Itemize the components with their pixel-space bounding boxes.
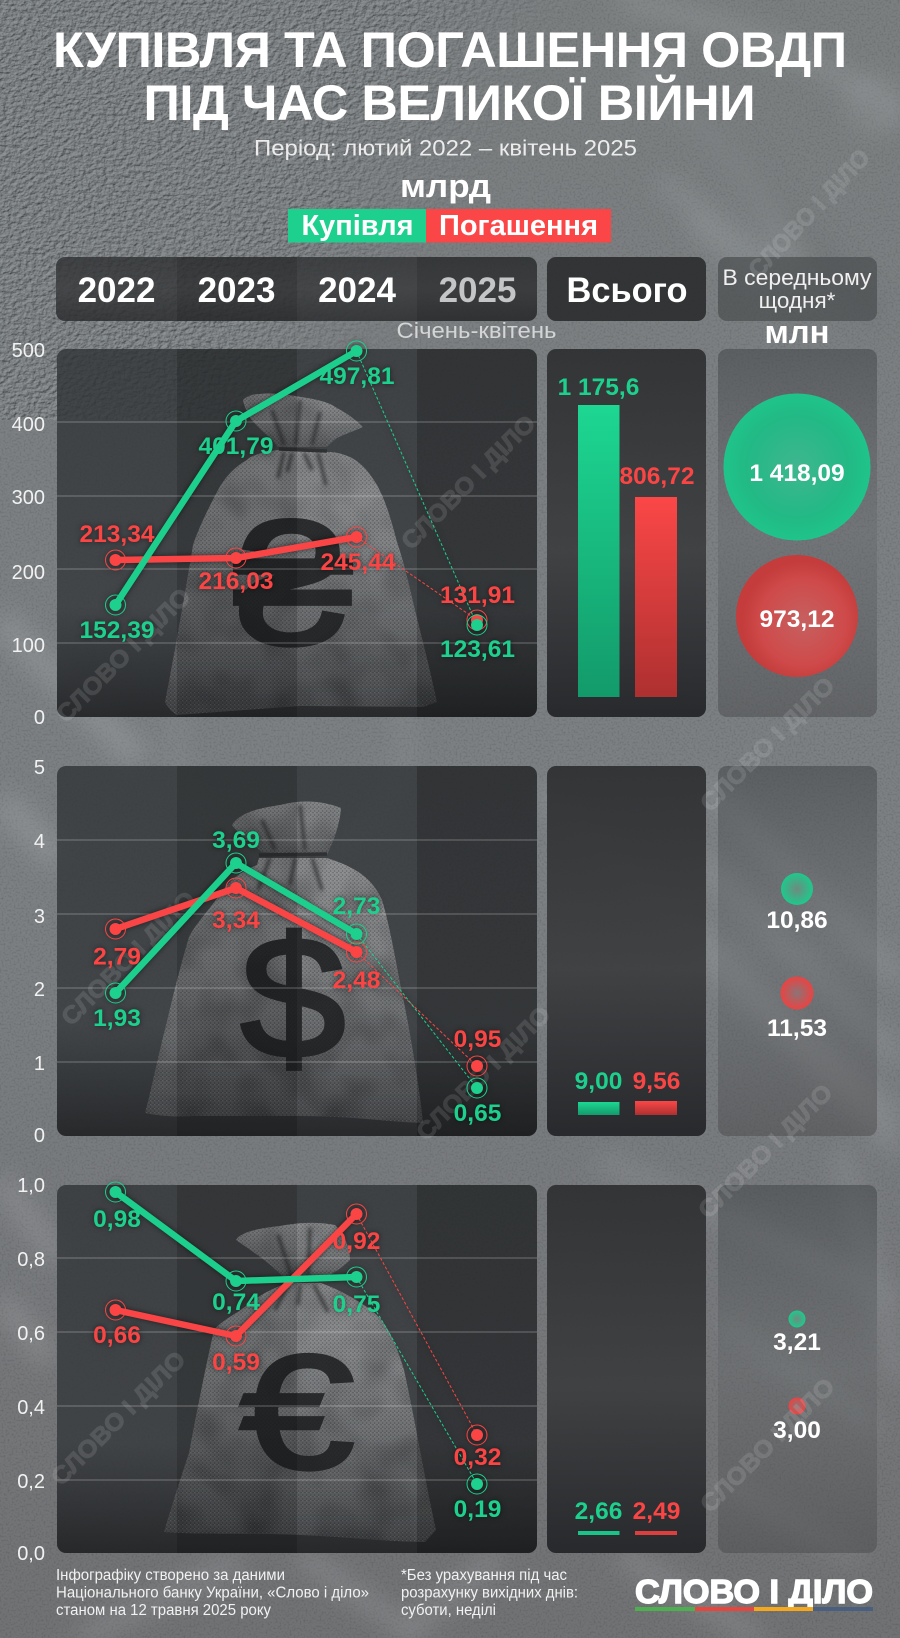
header: daily average: щодня* [759, 288, 836, 313]
y axis: hryvnia [12, 340, 45, 729]
line chart: dollar: 3,69 [212, 827, 260, 854]
y axis: dollar [34, 757, 45, 1147]
line chart: dollar: 0,65 [454, 1100, 501, 1127]
y axis: dollar: 2 [34, 979, 45, 1001]
line chart: euro: 0,75 [333, 1291, 380, 1318]
column headers: 2025 [439, 271, 516, 310]
watermarks: СЛОВО І ДІЛО [695, 672, 840, 817]
unit label: млн: млн [764, 314, 830, 350]
y axis: hryvnia: 400 [12, 414, 45, 436]
y axis: euro [17, 1175, 45, 1565]
line chart: hryvnia: 245,44 [321, 549, 396, 576]
line chart: dollar: 3,34 [212, 907, 260, 934]
column headers [56, 257, 537, 321]
bar: total purchases: 2,66 [575, 1498, 622, 1525]
y axis: euro: 0,4 [17, 1397, 45, 1419]
icon: money bag euro [164, 1185, 537, 1553]
title [53, 21, 847, 131]
y axis: euro: 1,0 [17, 1175, 45, 1197]
column headers: 2022 [78, 271, 155, 310]
panel: total hryvnia [547, 349, 706, 717]
line chart: euro: 0,74 [212, 1289, 260, 1316]
y axis: hryvnia: 300 [12, 487, 45, 509]
footer: source [56, 1567, 369, 1619]
y axis: dollar: 5 [34, 757, 45, 779]
header: total [547, 257, 706, 321]
line chart: dollar: 1,93 [93, 1005, 141, 1032]
circle: daily purchases: 3,21 [773, 1329, 821, 1356]
line chart: euro: 0,19 [454, 1496, 501, 1523]
watermarks: СЛОВО І ДІЛО [695, 1373, 840, 1518]
y axis: dollar: 1 [34, 1053, 45, 1075]
line chart: euro: 0,92 [333, 1228, 380, 1255]
circle: daily purchases [766, 873, 828, 934]
circle: daily purchases [773, 1310, 821, 1356]
watermarks: СЛОВО І ДІЛО [51, 583, 196, 728]
panel: daily dollar [718, 766, 877, 1136]
line chart: dollar [93, 827, 501, 1127]
gridlines [57, 422, 537, 643]
circle: daily redemptions: 3,00 [773, 1417, 821, 1444]
circle: daily redemptions [773, 1398, 821, 1444]
line chart: dollar: 0,95 [454, 1026, 501, 1053]
watermarks: СЛОВО І ДІЛО [693, 1079, 838, 1224]
watermarks: СЛОВО І ДІЛО [46, 1346, 191, 1491]
header: daily average: В середньому [722, 265, 872, 290]
y axis: euro: 0,0 [17, 1543, 45, 1565]
bar: total redemptions [633, 1068, 680, 1115]
line chart: hryvnia: 216,03 [199, 568, 273, 595]
bar: total purchases: 9,00 [575, 1068, 622, 1095]
icon: money bag dollar: $ [240, 902, 346, 1094]
footer: note: *Без урахування під час [401, 1567, 567, 1584]
unit label: млрд: млрд [400, 168, 491, 204]
line chart: dollar: 2,48 [333, 967, 380, 994]
panel: total dollar [547, 766, 706, 1136]
footer: note [401, 1567, 578, 1619]
bar: total purchases [558, 374, 639, 697]
line chart: euro: 0,66 [93, 1322, 141, 1349]
watermarks [46, 144, 876, 1518]
line chart: euro: 0,32 [454, 1444, 501, 1471]
watermarks: СЛОВО І ДІЛО [56, 886, 201, 1031]
legend [288, 209, 611, 242]
circle: daily purchases: 10,86 [766, 907, 828, 934]
watermarks: СЛОВО І ДІЛО [396, 410, 541, 555]
y axis: hryvnia: 0 [34, 707, 45, 729]
gridlines [57, 1258, 537, 1480]
y axis: hryvnia: 100 [12, 635, 45, 657]
bar: total redemptions: 806,72 [620, 463, 694, 490]
footer: source: Інфографіку створено за даними [56, 1567, 285, 1584]
y axis: dollar: 4 [34, 831, 45, 853]
header: daily average [718, 257, 877, 321]
bar: total purchases [575, 1068, 622, 1115]
y axis: dollar: 3 [34, 906, 45, 928]
column headers: 2023 [198, 271, 275, 310]
watermarks: СЛОВО І ДІЛО [411, 1001, 556, 1146]
bar: total redemptions: 9,56 [633, 1068, 680, 1095]
title: ПІД ЧАС ВЕЛИКОЇ ВІЙНИ [144, 74, 756, 131]
line chart: euro: 0,98 [93, 1206, 141, 1233]
y axis: hryvnia: 200 [12, 562, 45, 584]
footer: source: Національного банку України, «Слово і діло» [56, 1584, 369, 1602]
panel: total euro [547, 1185, 706, 1553]
y axis: hryvnia: 500 [12, 340, 45, 362]
line chart: euro [93, 1182, 501, 1523]
circle: daily purchases: 1 418,09 [749, 460, 845, 487]
icon: money bag hryvnia [165, 349, 537, 717]
watermarks: СЛОВО І ДІЛО [743, 144, 876, 283]
line chart: euro: 0,59 [212, 1349, 260, 1376]
line chart: hryvnia: 213,34 [80, 521, 155, 548]
line chart: hryvnia: 152,39 [80, 617, 154, 644]
panel: daily euro [718, 1185, 877, 1553]
bar: total purchases: 1 175,6 [558, 374, 639, 401]
subtitle: Період: лютий 2022 – квітень 2025 [254, 136, 637, 160]
line chart: hryvnia: 123,61 [440, 636, 515, 663]
line chart: hryvnia [80, 341, 515, 663]
title: КУПІВЛЯ ТА ПОГАШЕННЯ ОВДП [53, 21, 847, 78]
circle: daily redemptions [767, 976, 827, 1042]
panel: daily hryvnia [718, 349, 877, 717]
panel: dollar chart [57, 766, 537, 1136]
logo: СЛОВО І ДІЛО [635, 1573, 873, 1610]
legend: Погашення [439, 210, 598, 242]
panel: euro chart [57, 1185, 537, 1553]
footer: note: розрахунку вихідних днів: [401, 1584, 578, 1602]
line chart: hryvnia: 131,91 [440, 582, 515, 609]
panel: hryvnia chart [57, 349, 537, 717]
gridlines [57, 840, 537, 1062]
circle: daily purchases [724, 394, 870, 540]
header: total: Всього [566, 271, 688, 310]
footer: note: суботи, неділі [401, 1602, 496, 1619]
bar: total redemptions [620, 463, 694, 697]
column headers: 2024 [318, 271, 396, 310]
line chart: hryvnia: 497,81 [320, 363, 394, 390]
circle: daily redemptions: 973,12 [760, 606, 834, 633]
legend: Купівля [302, 210, 414, 242]
note: January-April: Січень-квітень [396, 318, 556, 343]
line chart: dollar: 2,79 [93, 944, 141, 970]
footer: source: станом на 12 травня 2025 року [56, 1602, 271, 1619]
circle: daily redemptions [736, 555, 858, 677]
line chart: hryvnia: 401,79 [199, 433, 273, 460]
y axis: dollar: 0 [34, 1125, 45, 1147]
y axis: euro: 0,2 [17, 1471, 45, 1493]
bar: total redemptions: 2,49 [633, 1498, 680, 1525]
icon: money bag hryvnia: ₴ [234, 490, 352, 680]
y axis: euro: 0,8 [17, 1249, 45, 1271]
icon: money bag euro: € [240, 1322, 354, 1503]
icon: money bag dollar [145, 766, 537, 1136]
y axis: euro: 0,6 [17, 1323, 45, 1345]
line chart: dollar: 2,73 [333, 893, 380, 920]
circle: daily redemptions: 11,53 [767, 1015, 827, 1042]
